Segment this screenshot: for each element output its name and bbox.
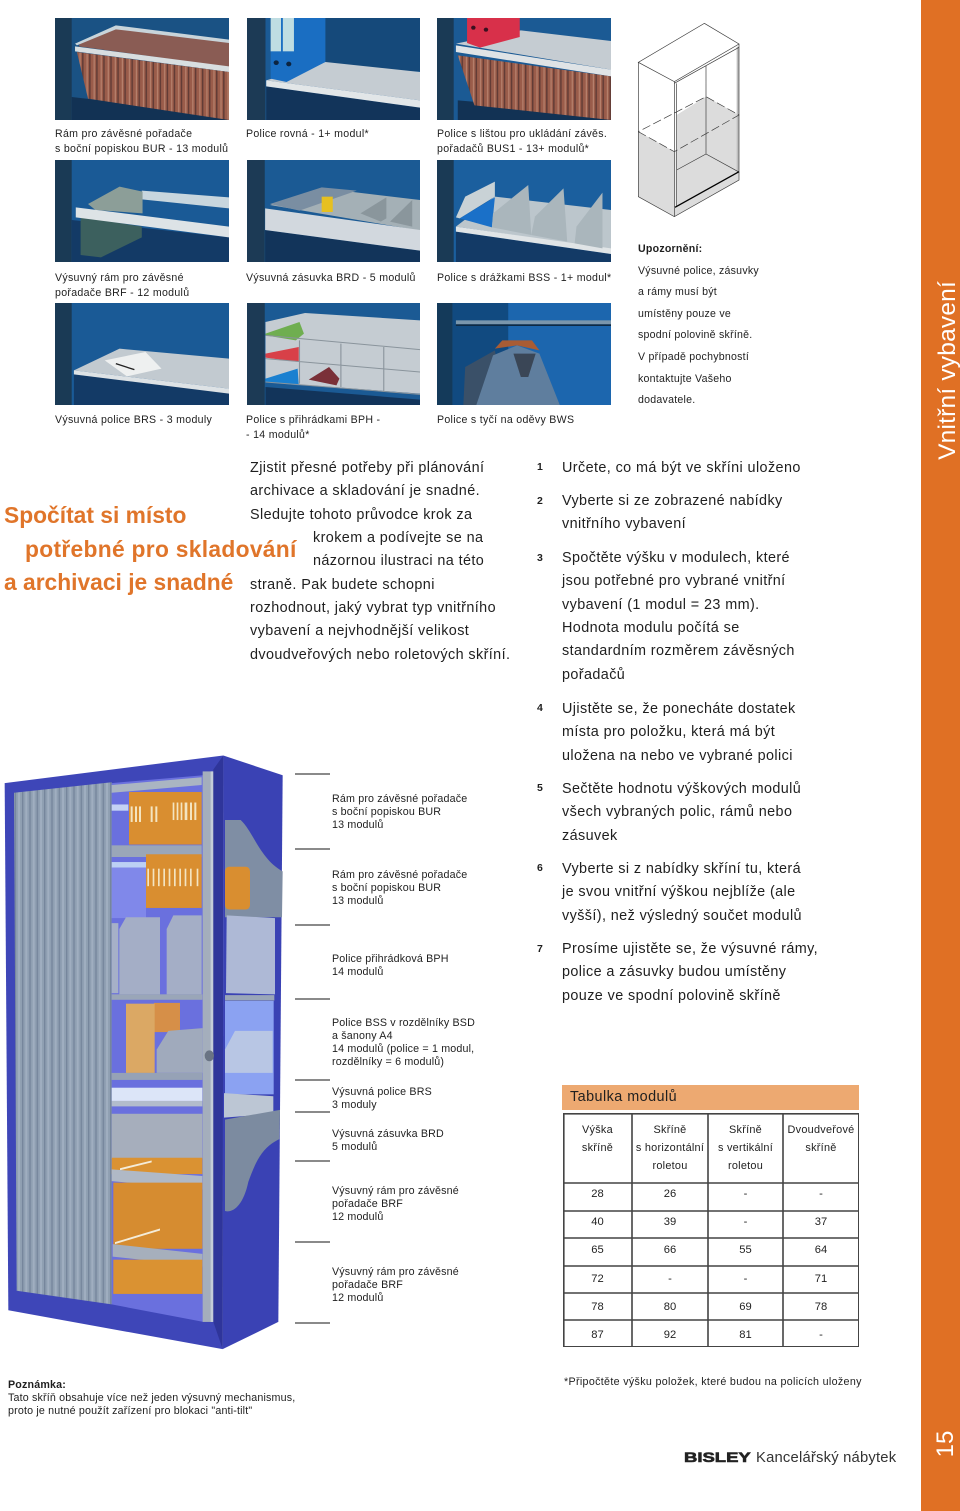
column: double-door values: 37 [815, 1216, 827, 1228]
step 2 number: 2 [537, 495, 543, 507]
callout: BUR 1: Rám pro závěsné pořadače [332, 793, 467, 805]
step 4: Ujistěte se, že ponecháte dostatek [562, 701, 796, 717]
column: vertical values: 55 [739, 1244, 752, 1256]
intro paragraph: Sledujte tohoto průvodce krok za [250, 507, 472, 523]
caption: BUS1: Police s lištou pro ukládání závěs. [437, 128, 607, 140]
column: heights: 65 [591, 1244, 604, 1256]
callout: BUR 2: s boční popiskou BUR [332, 882, 441, 894]
column header: horizontal: roletou [652, 1160, 688, 1172]
step 5 number: 5 [537, 782, 543, 794]
intro paragraph: straně. Pak budete schopni [250, 577, 435, 593]
footnote: anti-tilt: proto je nutné použít zařízení pro blokaci "anti-tilt" [8, 1405, 252, 1417]
page number: 15 [932, 1431, 959, 1457]
callout: BSS: rozdělníky = 6 modulů) [332, 1056, 444, 1068]
table heading bar [562, 1085, 859, 1110]
step 3: standardním rozměrem závěsných [562, 643, 795, 659]
sidebar: orange band [921, 0, 960, 1511]
column header: vertical: s vertikální [718, 1142, 773, 1154]
step 6: vyšší), než výsledný součet modulů [562, 908, 802, 924]
column: horizontal values: - [668, 1273, 672, 1285]
callout: BSS: 14 modulů (police = 1 modul, [332, 1043, 474, 1055]
column: heights: 28 [591, 1188, 604, 1200]
step 3: pořadačů [562, 667, 625, 683]
photo: BRF suspension frame [55, 160, 229, 262]
caption: flat shelf: Police rovná - 1+ modul* [246, 128, 369, 140]
callout: BRD [332, 1128, 444, 1153]
column: horizontal values: 39 [664, 1216, 676, 1228]
main heading [4, 502, 297, 595]
callout: BUR 2: Rám pro závěsné pořadače [332, 869, 467, 881]
caption: BPH: - 14 modulů* [246, 428, 310, 440]
callout: BRD: 5 modulů [332, 1141, 377, 1153]
step 2: vnitřního vybavení [562, 516, 686, 532]
callout: BSS: a šanony A4 [332, 1030, 393, 1042]
callout: BUR 1: 13 modulů [332, 819, 383, 831]
intro paragraph: archivace a skladování je snadné. [250, 483, 480, 499]
step 4 number: 4 [537, 702, 543, 714]
photo: shelf with hanging files [437, 18, 611, 120]
warning note: Upozornění: [638, 243, 702, 255]
intro paragraph [250, 460, 510, 663]
column: horizontal values: 92 [664, 1329, 676, 1341]
photo: BPH pigeonholes [247, 303, 420, 405]
step 6 [562, 861, 802, 924]
caption: BRF [55, 272, 189, 298]
caption: BRD: Výsuvná zásuvka BRD - 5 modulů [246, 272, 416, 284]
column header: vertical: roletou [728, 1160, 763, 1172]
caption: BWS: Police s tyčí na oděvy BWS [437, 414, 574, 426]
callout: BRF 1: pořadače BRF [332, 1198, 403, 1210]
warning note: a rámy musí být [638, 286, 717, 298]
callout: BSS: Police BSS v rozdělníky BSD [332, 1017, 475, 1029]
step numbers [537, 461, 543, 955]
callout: BRS: Výsuvná police BRS [332, 1086, 432, 1098]
callout: BRF 2: pořadače BRF [332, 1279, 403, 1291]
caption: BRF: Výsuvný rám pro závěsné [55, 272, 184, 284]
caption: BRS: Výsuvná police BRS - 3 moduly [55, 414, 212, 426]
photo: BWS clothes rail with jacket [437, 303, 611, 405]
callout: BRF 1 [332, 1185, 459, 1223]
callout: BRF 1: 12 modulů [332, 1211, 383, 1223]
caption: BSS: Police s drážkami BSS - 1+ modul* [437, 272, 611, 284]
column header: horizontal: Skříně [654, 1124, 686, 1136]
step 5: zásuvek [562, 828, 618, 844]
footnote: anti-tilt: Tato skříň obsahuje více než jeden výsuvný mechanismus, [8, 1392, 295, 1404]
column: double-door values [783, 1180, 859, 1349]
callout: BUR 2: 13 modulů [332, 895, 383, 907]
step 2: Vyberte si ze zobrazené nabídky [562, 493, 783, 509]
callout: BSS [332, 1017, 475, 1068]
column header: double door: Dvoudveřové [788, 1124, 854, 1136]
step 7: police a zásuvky budou umístěny [562, 964, 786, 980]
column header: double door: skříně [805, 1142, 837, 1154]
illustration: cabinet wireframe [638, 23, 740, 217]
callout: BRS: 3 moduly [332, 1099, 377, 1111]
caption: BUS1 [437, 128, 607, 154]
footnote: anti-tilt: Poznámka: [8, 1379, 66, 1391]
caption: BUR: s boční popiskou BUR - 13 modulů [55, 142, 228, 154]
column: horizontal values: 80 [664, 1301, 676, 1313]
intro paragraph: krokem a podívejte se na [313, 530, 483, 546]
step 3: jsou potřebné pro vybrané vnitřní [562, 573, 786, 589]
column: horizontal values [632, 1180, 708, 1349]
step 4 [562, 701, 796, 764]
column header: height: Výška [582, 1124, 613, 1136]
column header: double door [788, 1124, 854, 1154]
column header: horizontal: s horizontální [636, 1142, 704, 1154]
illustration: roller-door cabinet [4, 756, 283, 1350]
callout: BRF 2: Výsuvný rám pro závěsné [332, 1266, 459, 1278]
step 3: Spočtěte výšku v modulech, které [562, 550, 790, 566]
caption: BUR: Rám pro závěsné pořadače [55, 128, 192, 140]
warning note: dodavatele. [638, 394, 695, 406]
photo: BUR frame [55, 18, 229, 120]
step 2 [562, 493, 783, 532]
step 1 number: 1 [537, 461, 543, 473]
photo: BRS pull-out shelf [55, 303, 229, 405]
callout: BRF 2 [332, 1266, 459, 1304]
column header: vertical [718, 1124, 773, 1172]
callout: BRF 2: 12 modulů [332, 1292, 383, 1304]
warning note: kontaktujte Vašeho [638, 373, 732, 385]
callout: BRF 1: Výsuvný rám pro závěsné [332, 1185, 459, 1197]
callout: BUR 1: s boční popiskou BUR [332, 806, 441, 818]
column: heights: 87 [591, 1329, 604, 1341]
callout: BRS [332, 1086, 432, 1111]
step 6 number: 6 [537, 862, 543, 874]
column: vertical values: - [744, 1216, 747, 1228]
callout: BUR 1 [332, 793, 467, 831]
warning note: V případě pochybností [638, 351, 749, 363]
footnote: asterisk: *Připočtěte výšku položek, které budou na policích uloženy [564, 1376, 862, 1388]
leader lines for cabinet callouts [295, 773, 330, 1324]
step 1: Určete, co má být ve skříni uloženo [562, 460, 801, 476]
intro paragraph: rozhodnout, jaký vybrat typ vnitřního [250, 600, 496, 616]
caption: BPH [246, 414, 380, 440]
column: vertical values: 81 [739, 1329, 752, 1341]
step 7: Prosíme ujistěte se, že výsuvné rámy, [562, 941, 818, 957]
caption: BRF: pořadače BRF - 12 modulů [55, 286, 189, 298]
main heading: a archivaci je snadné [4, 569, 233, 595]
column: vertical values: - [744, 1273, 747, 1285]
warning note: umístěny pouze ve [638, 308, 731, 320]
column header: height: skříně [582, 1142, 613, 1154]
step 3: Hodnota modulu počítá se [562, 620, 740, 636]
footnote: anti-tilt [8, 1379, 295, 1417]
cabinet body [5, 755, 283, 1349]
intro paragraph: názornou ilustraci na této [313, 553, 484, 569]
warning note [638, 243, 759, 406]
intro paragraph: dvoudveřových nebo roletových skříní. [250, 647, 510, 663]
column: horizontal values: 26 [664, 1188, 676, 1200]
step 5: Sečtěte hodnotu výškových modulů [562, 781, 801, 797]
photo: BSS slotted shelf [437, 160, 611, 262]
callout: BPH [332, 953, 449, 978]
column: double-door values: 78 [815, 1301, 827, 1313]
logo wordmark: BISLEY [684, 1449, 751, 1465]
step 4: místa pro položku, která má být [562, 724, 775, 740]
roller shutter [14, 782, 112, 1304]
caption: BUR [55, 128, 228, 154]
warning note: spodní polovině skříně. [638, 329, 752, 341]
column: double-door values: 64 [815, 1244, 827, 1256]
door rail [203, 771, 214, 1322]
column: double-door values: - [819, 1188, 823, 1200]
caption: BUS1: pořadačů BUS1 - 13+ modulů* [437, 142, 589, 154]
column header: vertical: Skříně [729, 1124, 762, 1136]
column: heights: 40 [591, 1216, 604, 1228]
column: heights [591, 1188, 604, 1341]
intro paragraph: Zjistit přesné potřeby při plánování [250, 460, 484, 476]
callout: BPH: Police přihrádková BPH [332, 953, 449, 965]
warning note: Výsuvné police, zásuvky [638, 265, 759, 277]
table: modules [563, 1113, 859, 1347]
step 6: Vyberte si z nabídky skříní tu, která [562, 861, 801, 877]
column: vertical values: 69 [739, 1301, 752, 1313]
callout: BRD: Výsuvná zásuvka BRD [332, 1128, 444, 1140]
step 5: všech vybraných polic, rámů nebo [562, 804, 792, 820]
table heading bar: Tabulka modulů [570, 1089, 677, 1105]
main heading: Spočítat si místo [4, 502, 186, 528]
intro paragraph: vybavení a nejvhodnější velikost [250, 623, 469, 639]
column: heights: 78 [591, 1301, 604, 1313]
main heading: potřebné pro skladování [25, 536, 297, 562]
callout: BUR 2 [332, 869, 467, 907]
interior shelves and files [112, 777, 203, 1294]
brand tagline: Kancelářský nábytek [756, 1450, 896, 1466]
step 7: pouze ve spodní polovině skříně [562, 988, 781, 1004]
photo: BRD drawer [247, 160, 420, 262]
step 7 number: 7 [537, 943, 543, 955]
callout: BPH: 14 modulů [332, 966, 383, 978]
photo: flat shelf with binder [247, 18, 420, 120]
side panel with visible contents [224, 820, 283, 1211]
column header: horizontal [636, 1124, 704, 1172]
step 4: uložena na nebo ve vybrané polici [562, 748, 793, 764]
column header: height [582, 1124, 613, 1154]
column: double-door values: - [819, 1329, 823, 1341]
step 3 number: 3 [537, 552, 543, 564]
caption: BPH: Police s přihrádkami BPH - [246, 414, 380, 426]
brand logo [684, 1445, 896, 1471]
column: vertical values [708, 1180, 783, 1349]
column: heights: 72 [591, 1273, 604, 1285]
column: horizontal values: 66 [664, 1244, 676, 1256]
column: double-door values: 71 [815, 1273, 827, 1285]
step 5 [562, 781, 801, 844]
step 3 [562, 550, 795, 683]
step 3: vybavení (1 modul = 23 mm). [562, 597, 760, 613]
step 6: je svou vnitřní výškou nejblíže (ale [562, 884, 796, 900]
column: vertical values: - [744, 1188, 747, 1200]
step 7 [562, 941, 818, 1004]
